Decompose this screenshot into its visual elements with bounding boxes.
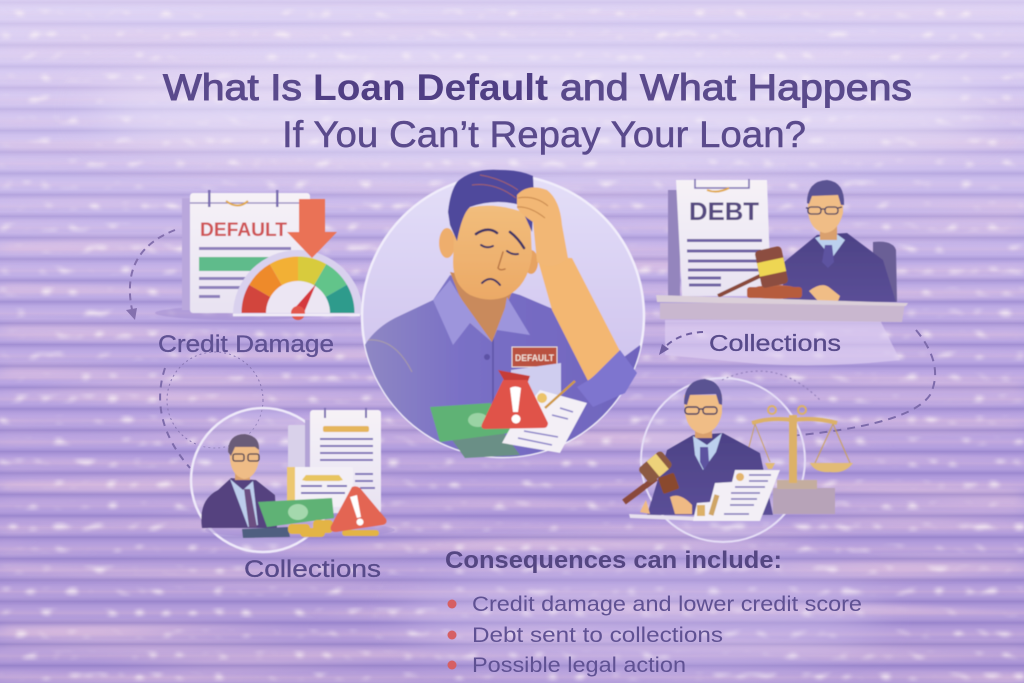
document with pencil bbox=[502, 381, 587, 453]
neck bbox=[450, 272, 515, 342]
warning triangle bbox=[482, 370, 548, 429]
hand bbox=[517, 187, 568, 266]
shirt bbox=[362, 275, 645, 470]
panel: legal action illustration bbox=[624, 371, 853, 542]
collar bbox=[433, 280, 492, 345]
ear right bbox=[524, 250, 538, 274]
bullet 2: Debt sent to collections bbox=[472, 624, 723, 647]
cash bbox=[242, 498, 334, 538]
default calendar card bbox=[182, 190, 310, 313]
bullet 3: Possible legal action bbox=[472, 654, 686, 677]
ear left bbox=[439, 228, 455, 258]
consequences heading: Consequences can include: bbox=[445, 547, 782, 574]
arrow: red down bbox=[287, 199, 337, 258]
pocket paper bbox=[511, 363, 561, 400]
arrow: dashed court to label bbox=[659, 332, 703, 355]
debt document bbox=[668, 179, 771, 296]
face bbox=[453, 206, 532, 300]
gavel bbox=[624, 450, 680, 502]
default calendar card: DEFAULT bbox=[200, 220, 287, 241]
desk bbox=[656, 295, 908, 365]
label: collections bottom left: Collections bbox=[244, 556, 381, 583]
money stack bbox=[430, 403, 520, 458]
arm bbox=[537, 257, 621, 381]
hair bbox=[448, 170, 534, 241]
businessman bbox=[201, 434, 277, 528]
arrow: dashed left loop bbox=[160, 352, 263, 468]
consequences list bbox=[448, 593, 862, 677]
label: credit damage: Credit Damage bbox=[158, 331, 334, 358]
credit score gauge bbox=[233, 250, 363, 320]
judge bbox=[640, 379, 773, 515]
gavel bbox=[718, 246, 802, 299]
title: and What Happens bbox=[560, 67, 912, 108]
arrow: dashed right loop bbox=[790, 330, 935, 436]
label: collections top right: Collections bbox=[709, 330, 841, 356]
bullet 1: Credit damage and lower credit score bbox=[472, 593, 862, 616]
debt document: DEBT bbox=[689, 198, 759, 226]
panel: central stressed man bbox=[362, 170, 645, 470]
default tag bbox=[512, 347, 557, 367]
panel: collections illustration bbox=[191, 408, 395, 552]
arrow: dashed left top bbox=[126, 230, 175, 320]
coins bbox=[288, 520, 379, 537]
scales of justice bbox=[745, 406, 853, 514]
eyebrows and eyes bbox=[476, 230, 524, 285]
title: If You Can’t Repay Your Loan? bbox=[282, 114, 806, 155]
panel: court collections illustration bbox=[656, 179, 908, 365]
title: What Is bbox=[163, 67, 302, 108]
document bbox=[629, 470, 780, 521]
default tag: DEFAULT bbox=[515, 353, 554, 364]
stacked documents bbox=[287, 408, 381, 513]
warning triangle bbox=[331, 486, 386, 532]
panel: credit damage illustration bbox=[155, 190, 363, 320]
hair highlights bbox=[472, 175, 518, 198]
title: Loan Default bbox=[313, 67, 548, 108]
chair bbox=[873, 242, 897, 302]
title bbox=[163, 67, 912, 155]
judge bbox=[783, 180, 896, 302]
sleeve bbox=[577, 350, 637, 407]
